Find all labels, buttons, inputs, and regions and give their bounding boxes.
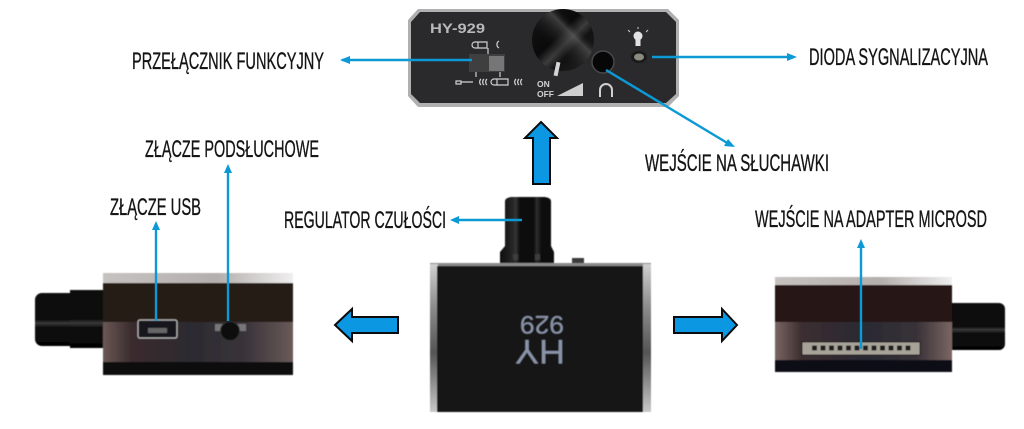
icon: USB port [138, 320, 177, 338]
text: model name: HY-929 [430, 20, 485, 36]
arrow: right [674, 309, 737, 341]
photo: device left side [35, 273, 293, 375]
callout: signal diode [652, 44, 988, 71]
icon: signal diode [631, 51, 647, 63]
arrow: up [525, 122, 557, 184]
label: REGULATOR CZUŁOŚCI [284, 206, 446, 234]
callout: function switch [132, 48, 472, 75]
icon: light bulb [628, 27, 648, 46]
text: upside-down HY 929: 929 [520, 310, 564, 338]
text: off label: OFF [537, 89, 554, 99]
icon: volume wedge [557, 83, 583, 96]
icon: sensitivity knob [532, 9, 594, 76]
leader line [450, 216, 522, 224]
text: upside-down HY 929: HY [515, 332, 565, 370]
icon: function switch [456, 41, 522, 85]
leader line [606, 70, 735, 147]
callout: microSD adapter input [755, 205, 987, 349]
label: PRZEŁĄCZNIK FUNKCYJNY [132, 48, 324, 75]
icon: headphones [600, 84, 612, 97]
callout: listening connector [145, 136, 319, 321]
photo: device rear view [430, 197, 651, 412]
arrow: left [335, 309, 398, 341]
icon: audio jack [215, 322, 246, 340]
leader line [152, 221, 160, 321]
text: upside-down HY 929 [515, 310, 565, 370]
label: ZŁĄCZE USB [110, 194, 201, 221]
icon: microSD slot [802, 342, 920, 355]
callout: USB connector [110, 194, 201, 321]
text: on label: ON [537, 79, 550, 89]
label: WEJŚCIE NA SŁUCHAWKI [645, 149, 829, 177]
panel: front panel HY-929 [408, 9, 679, 107]
callout: sensitivity control [284, 206, 522, 234]
leader line [340, 56, 472, 64]
photo: device right side [775, 277, 1005, 372]
callout: headphones input [606, 70, 829, 177]
icon: headphone socket [592, 51, 614, 73]
leader line [224, 164, 232, 321]
label: ZŁĄCZE PODSŁUCHOWE [145, 136, 319, 163]
leader line [857, 239, 865, 349]
leader line [652, 53, 797, 61]
knob tube [500, 197, 554, 263]
